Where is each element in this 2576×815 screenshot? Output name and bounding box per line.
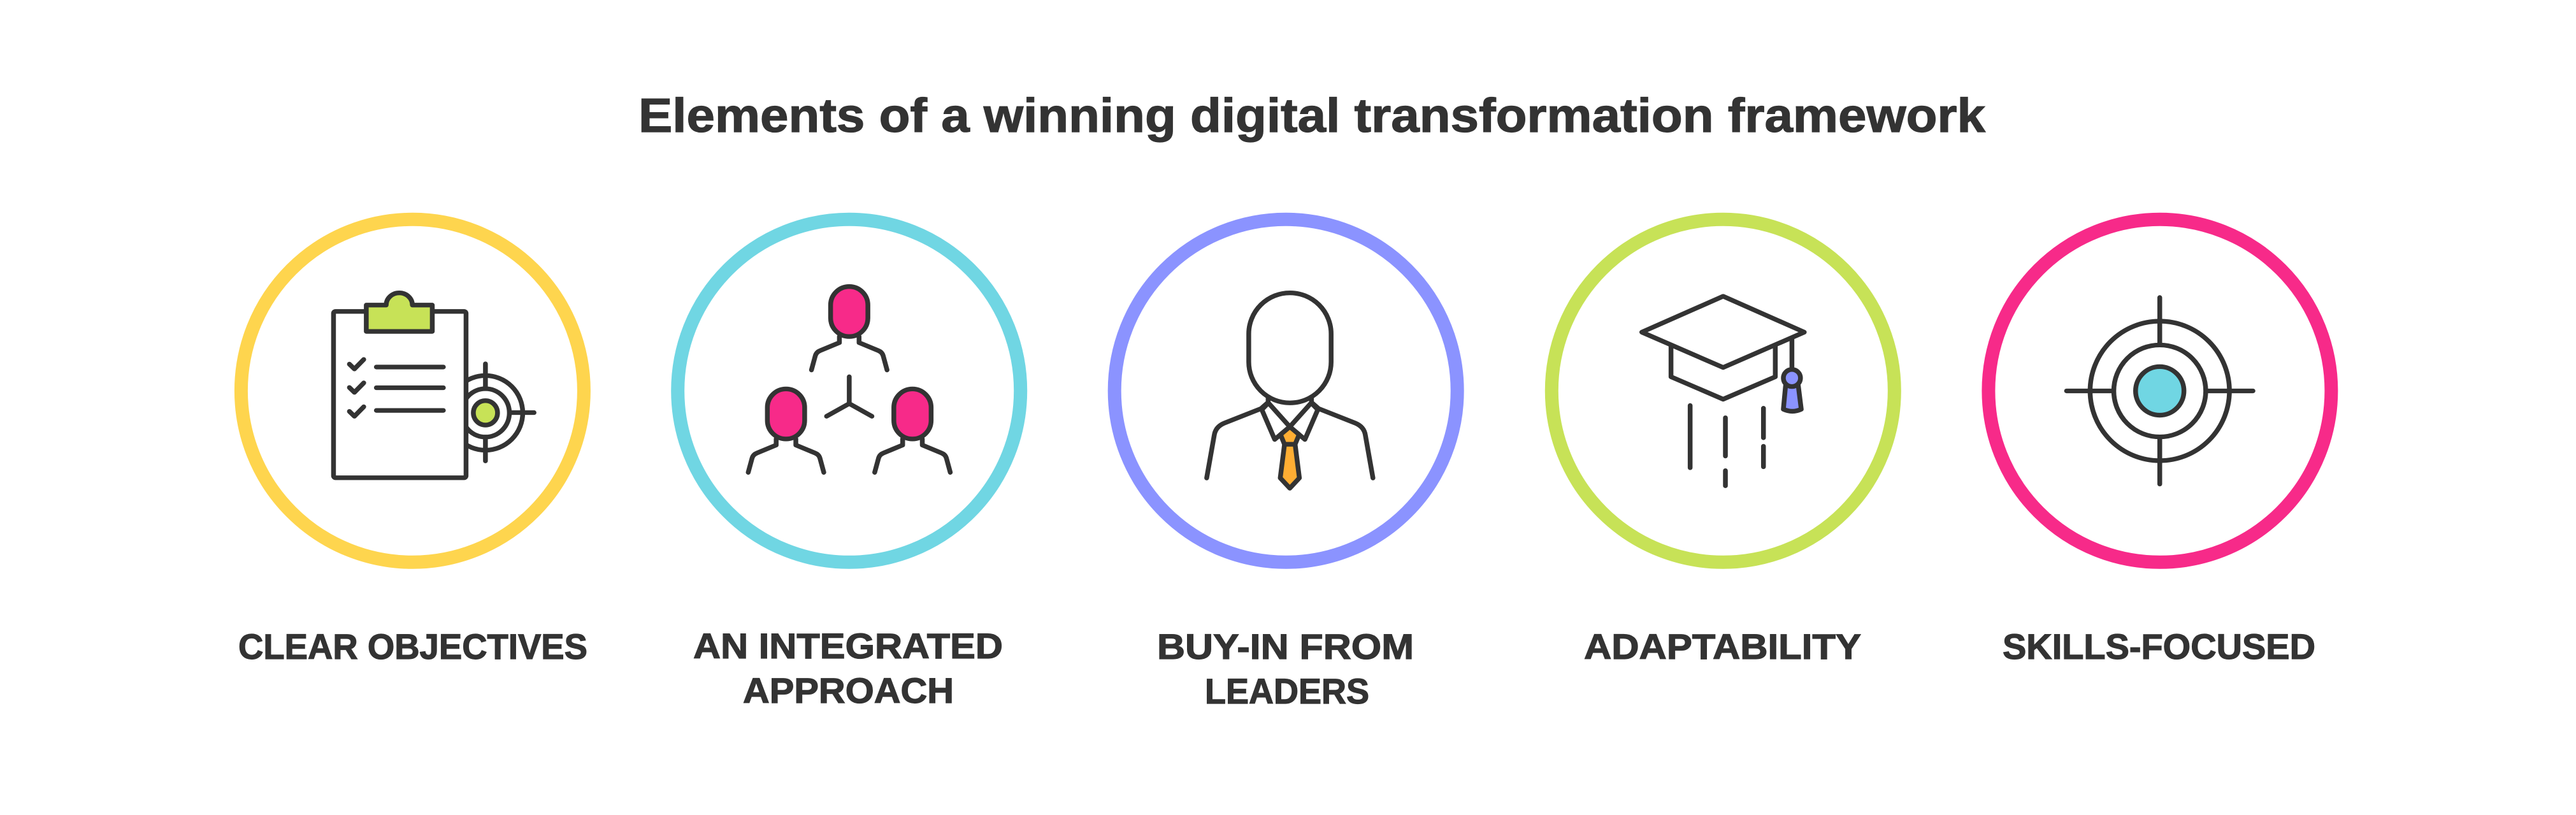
- label: clear objectives: CLEAR OBJECTIVES: [238, 626, 587, 667]
- ring: cyan: [678, 219, 1021, 562]
- label: skills-focused: SKILLS-FOCUSED: [2003, 626, 2315, 667]
- panel: clear objectives: [238, 219, 587, 667]
- icon: leader with tie: [1207, 293, 1373, 488]
- panel: an integrated approach: [678, 219, 1021, 710]
- panel: skills-focused: [1989, 219, 2331, 667]
- label: an integrated approach: [693, 626, 1003, 710]
- label: buy-in from leaders: [1157, 626, 1414, 711]
- ring: lime: [1551, 219, 1894, 562]
- ring: yellow: [241, 219, 584, 562]
- icon: three connected people: [748, 287, 950, 472]
- ring: periwinkle: [1114, 219, 1457, 562]
- icon: graduation cap: [1642, 296, 1804, 486]
- label: an integrated approach: AN INTEGRATED: [693, 626, 1003, 666]
- icon: clipboard with target: [333, 293, 534, 478]
- icon: crosshair target: [2066, 298, 2253, 484]
- label: an integrated approach: APPROACH: [743, 670, 954, 710]
- ring: pink: [1989, 219, 2331, 562]
- panel: adaptability: [1551, 219, 1894, 667]
- label: adaptability: ADAPTABILITY: [1584, 626, 1861, 667]
- title: Elements of a winning digital transformation framework: [638, 89, 1985, 142]
- label: buy-in from leaders: LEADERS: [1205, 671, 1369, 711]
- label: buy-in from leaders: BUY-IN FROM: [1157, 626, 1414, 667]
- panel: buy-in from leaders: [1114, 219, 1457, 711]
